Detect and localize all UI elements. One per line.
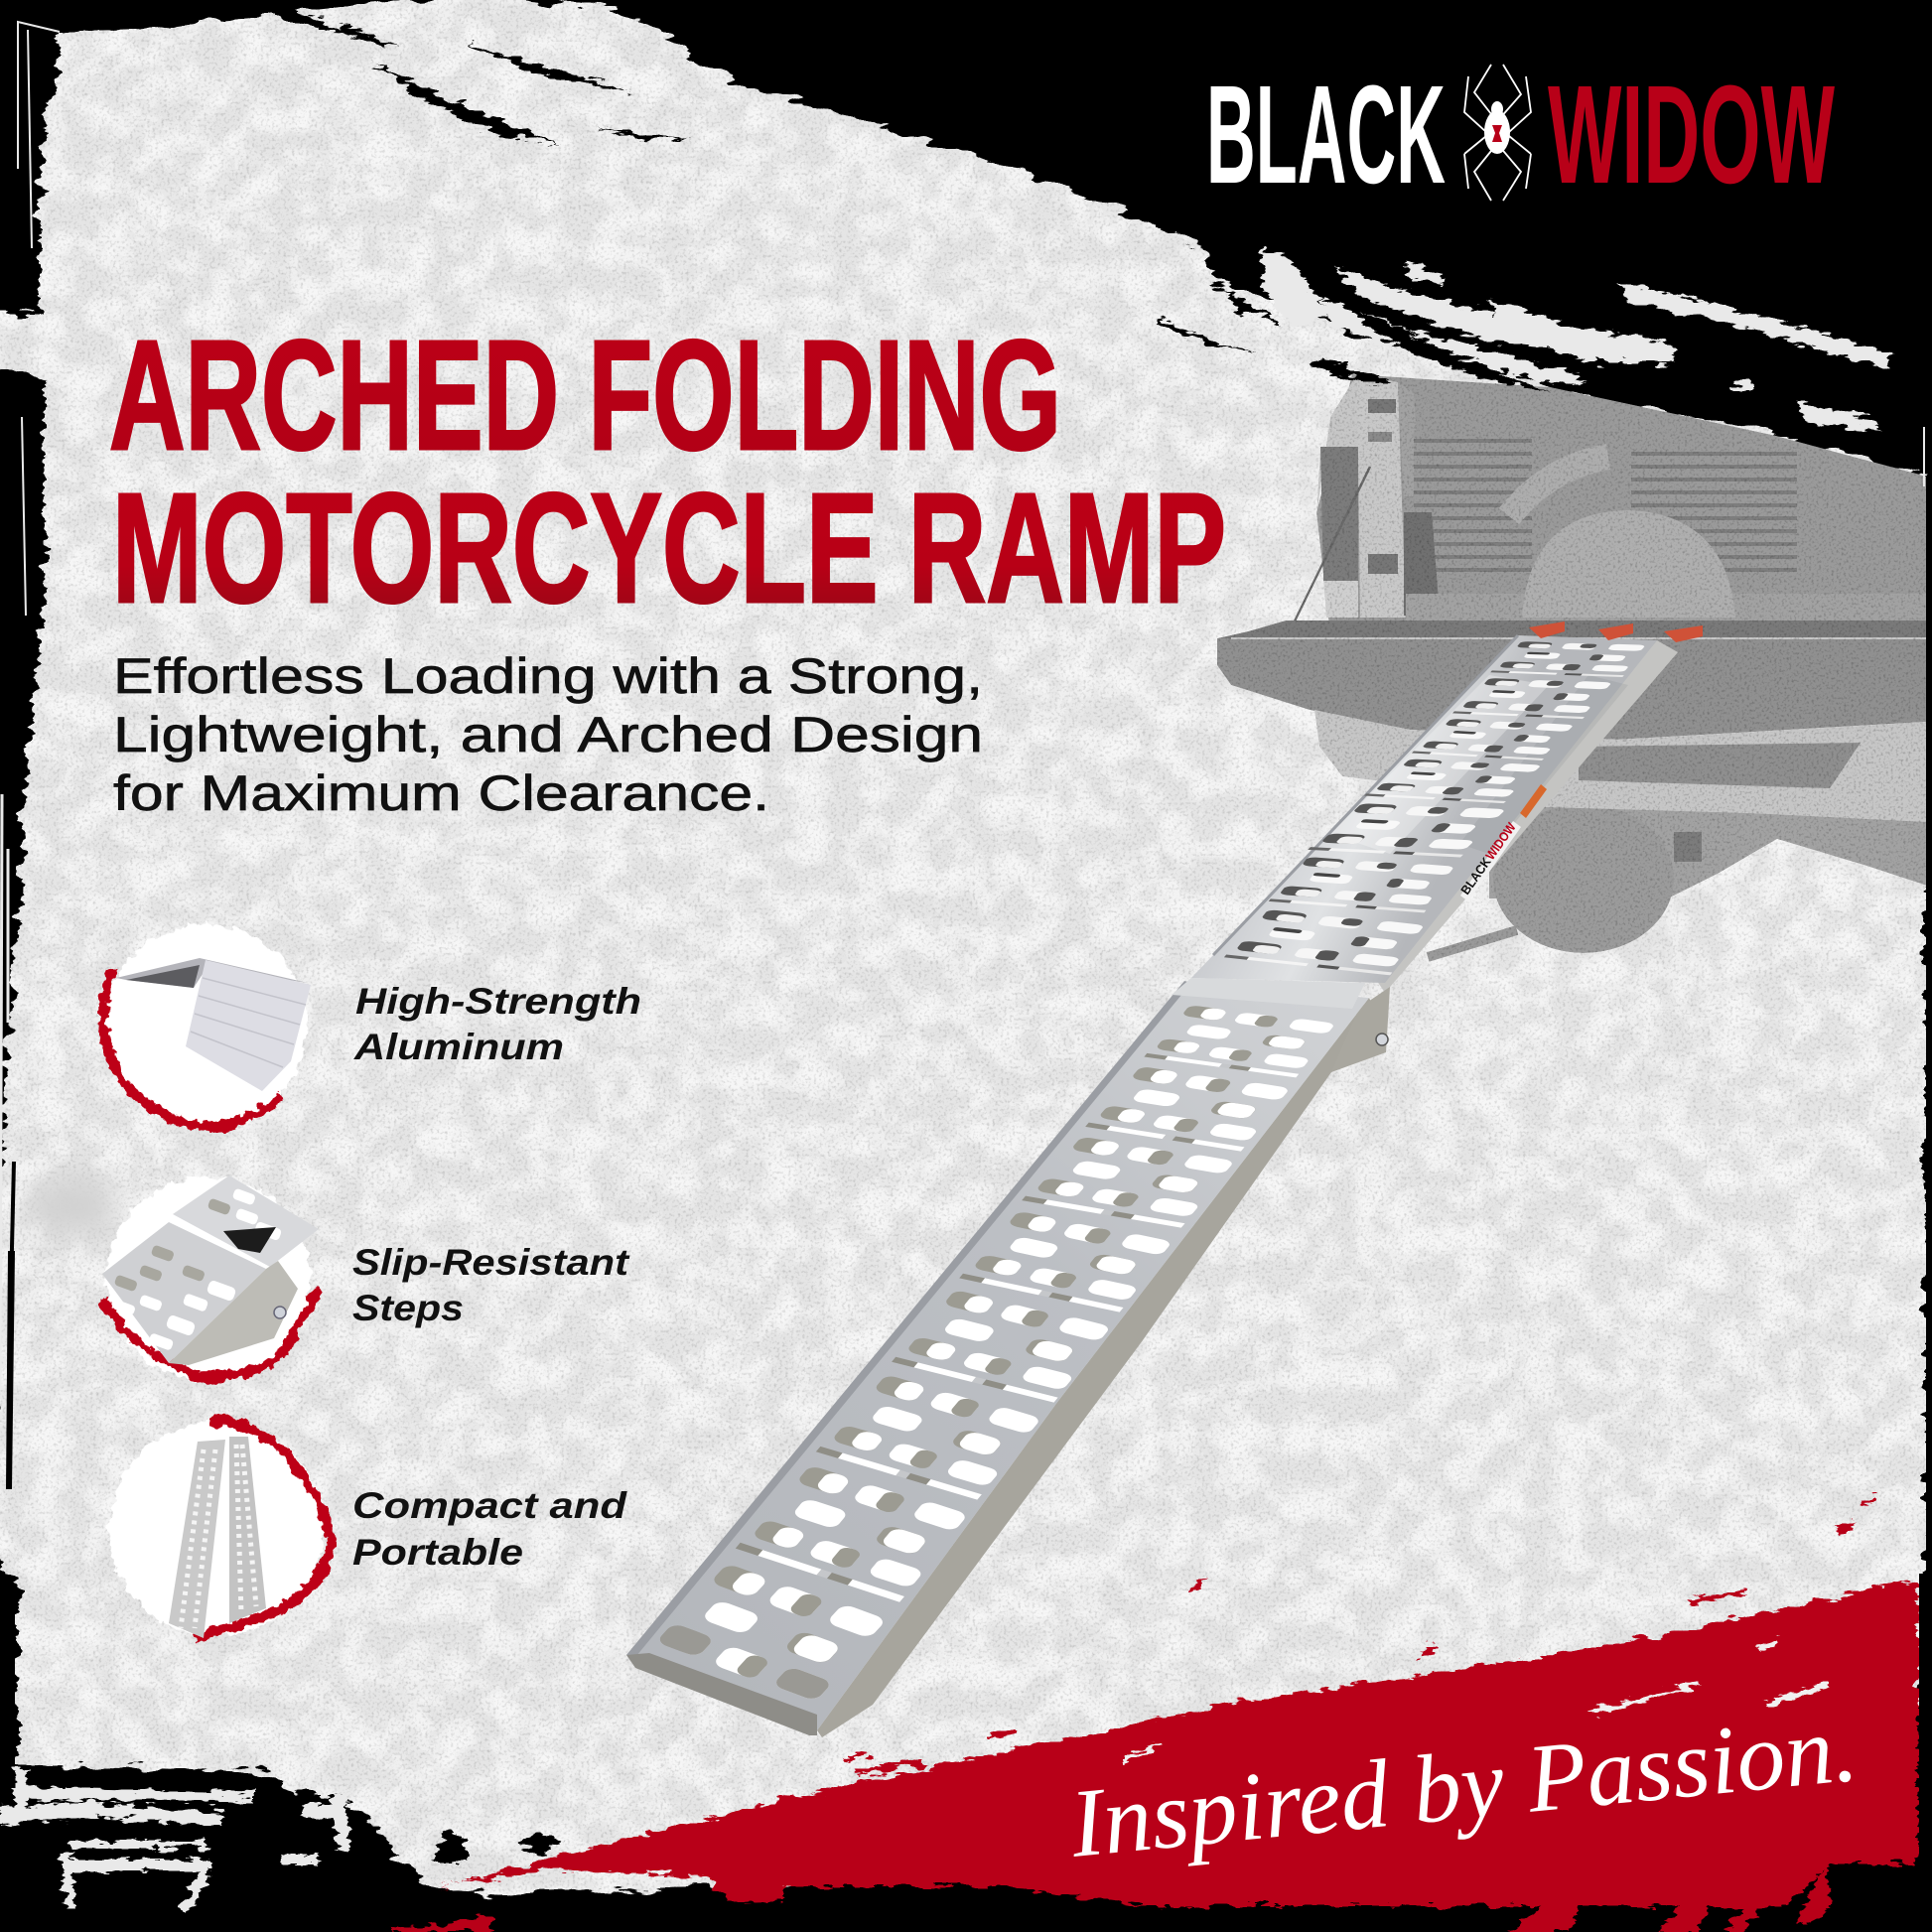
red hook tabs xyxy=(1529,621,1703,642)
black scratches on the lower left margin xyxy=(0,1162,16,1767)
ramp brand sticker: BLACK xyxy=(1457,854,1494,897)
white scratches on the banner xyxy=(1122,1640,1829,1763)
ramp brand sticker: WIDOW xyxy=(1482,819,1519,863)
subtitle: Effortless Loading with a Strong, xyxy=(113,648,983,704)
icon: spider xyxy=(1464,65,1531,201)
title xyxy=(109,309,1226,635)
feature icon: folded aluminium end xyxy=(103,924,311,1127)
feature text: High-Strength xyxy=(355,981,641,1022)
title: MOTORCYCLE RAMP xyxy=(112,462,1226,635)
warning sticker xyxy=(1520,784,1547,818)
ramp brand sticker xyxy=(1457,819,1521,901)
feature icon: folded ramp standing xyxy=(109,1420,331,1638)
brand logo: BLACK xyxy=(1206,56,1446,212)
feature text xyxy=(352,1242,630,1328)
subtitle xyxy=(113,648,983,821)
faded pickup truck xyxy=(1217,374,1927,957)
feature icon: ramp hinge close-up xyxy=(102,1175,320,1381)
subtitle: Lightweight, and Arched Design xyxy=(113,707,983,762)
lower-left white brush marks on black xyxy=(0,1767,349,1914)
folding ramp product xyxy=(626,621,1703,1737)
grey smear behind second feature xyxy=(30,1174,119,1238)
feature: compact and portable xyxy=(109,1420,628,1638)
upper ramp side rail xyxy=(1375,640,1678,993)
feature text: Portable xyxy=(352,1532,523,1573)
lower ramp side rail xyxy=(817,998,1386,1737)
lower ramp deck xyxy=(626,978,1369,1730)
feature text: Aluminum xyxy=(353,1027,564,1067)
title: ARCHED FOLDING xyxy=(109,309,1061,483)
black page edge on right and bottom xyxy=(1919,477,1932,1932)
feature text: Slip-Resistant xyxy=(352,1242,630,1283)
feature text: Steps xyxy=(352,1288,464,1328)
upper ramp deck xyxy=(1191,635,1657,983)
subtitle: for Maximum Clearance. xyxy=(113,765,769,821)
feature text xyxy=(352,1485,628,1573)
black brush streaks over the paper xyxy=(89,4,1549,1886)
feature text xyxy=(353,981,641,1067)
red brush drips xyxy=(390,1495,1876,1932)
ramp foot end xyxy=(626,1653,817,1735)
tagline: Inspired by Passion. xyxy=(1065,1695,1862,1878)
white scuffs over the black corner xyxy=(1261,248,1891,432)
red brush banner xyxy=(390,1495,1918,1932)
thin white frame scratches on the left edge xyxy=(0,22,1924,1390)
feature text: Compact and xyxy=(352,1485,628,1526)
feature: high-strength aluminum xyxy=(103,924,641,1127)
feature: slip-resistant steps xyxy=(102,1175,630,1381)
hinge plate xyxy=(1331,987,1390,1072)
